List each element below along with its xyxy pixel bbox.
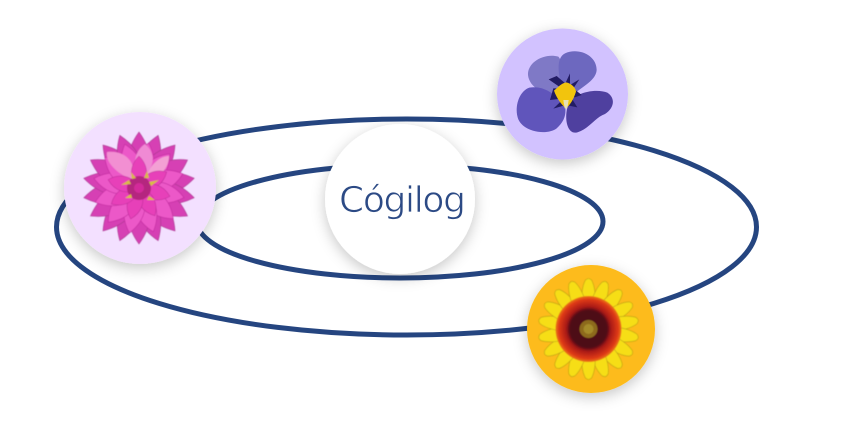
flower badge: viola (497, 28, 628, 160)
petal: bottom right (566, 91, 613, 133)
flower badge: dahlia (64, 112, 216, 264)
orbit: inner ellipse (197, 165, 603, 278)
petal: top right (559, 51, 597, 98)
orbit: outer ellipse (56, 119, 756, 335)
icon: gaillardia flower (538, 278, 639, 380)
flower throat (549, 73, 582, 109)
icon: viola flower (517, 51, 613, 133)
icon: dahlia flower (82, 132, 196, 244)
logo text: Cógilog (339, 180, 466, 221)
petal: top left (528, 56, 565, 95)
logo badge (325, 124, 475, 274)
flower badge: gaillardia (527, 265, 655, 393)
petal: bottom left (517, 87, 565, 132)
